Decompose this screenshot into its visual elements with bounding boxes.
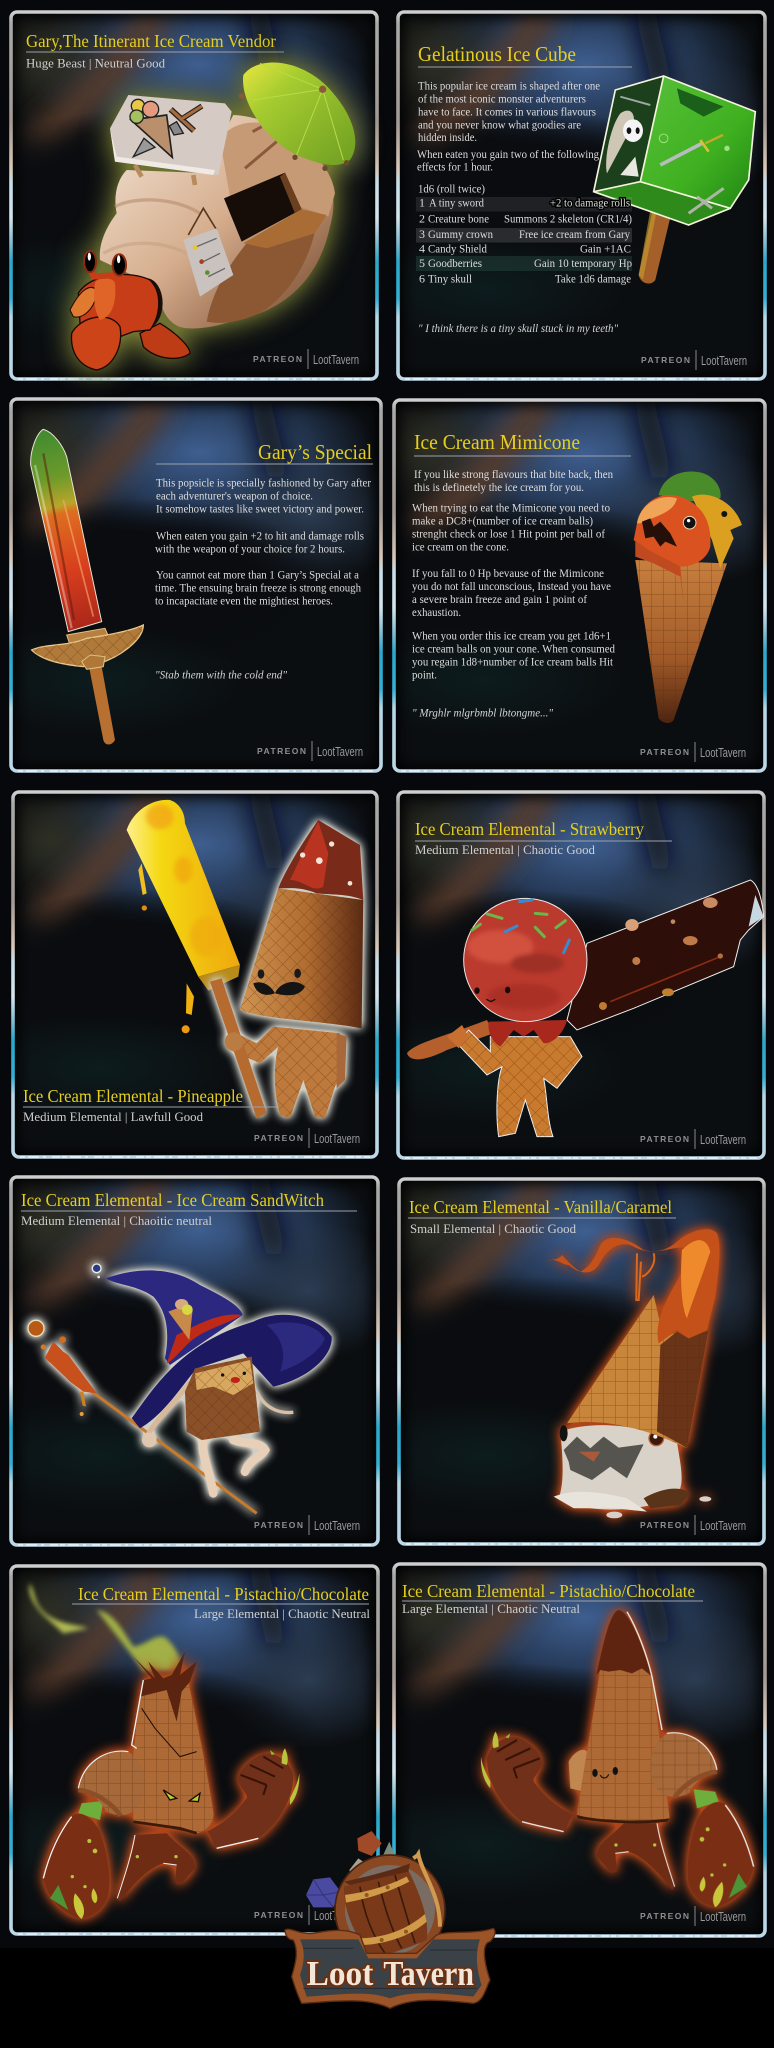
watermark: [253, 349, 359, 369]
panel: Strawberry elemental: [336, 755, 774, 1166]
table: 1d6 effects: A tiny sword: [429, 196, 484, 210]
table: 1d6 effects: 6: [419, 271, 425, 285]
heading: Mimicone: Ice Cream Mimicone: [414, 430, 580, 454]
description: [412, 467, 615, 682]
description: time. The ensuing brain freeze is strong enough: [155, 581, 361, 595]
watermark: [254, 1905, 360, 1925]
watermark: LootTavern: [700, 1909, 746, 1924]
sign plaque: [285, 1928, 495, 2008]
description: have to face. It comes in various flavours: [418, 104, 596, 118]
description: When trying to eat the Mimicone you need to: [412, 501, 610, 515]
watermark: PATREON: [254, 1520, 303, 1530]
heading: Vanilla/Caramel: Ice Cream Elemental - Vanilla/Caramel: [409, 1197, 672, 1217]
table: 1d6 effects: 4: [419, 241, 425, 255]
table: 1d6 effects: 1: [419, 196, 425, 210]
subtitle: SandWitch: Medium Elemental | Chaoitic neutral: [21, 1213, 212, 1228]
watermark: PATREON: [257, 746, 306, 756]
watermark: LootTavern: [317, 744, 363, 759]
table: 1d6 effects: Gain +1AC: [580, 241, 631, 255]
watermark: PATREON: [640, 747, 689, 757]
heading: Pistachio angry: Ice Cream Elemental - Pistachio/Chocolate: [78, 1584, 369, 1604]
subtitle: Gary: Huge Beast | Neutral Good: [26, 56, 165, 71]
logo: Loot Tavern barrel and sign: [285, 1831, 495, 2008]
illustration: strawberry elemental with ice cream bar sword: [407, 880, 764, 1137]
watermark: [640, 1515, 746, 1535]
panel: Pistachio/Chocolate elemental, happy: [332, 1527, 774, 1944]
description: strenght check or lose 1 Hit point per ball of: [412, 527, 605, 541]
table: 1d6 effects: 5: [419, 256, 425, 270]
logo wordmark: Loot: [307, 1954, 374, 1993]
description: with the weapon of your choice for 2 hours.: [155, 541, 345, 555]
heading: cube: Gelatinous Ice Cube: [418, 42, 576, 66]
table: 1d6 effects: Gummy crown: [428, 227, 493, 241]
panel: Pineapple elemental: [0, 755, 407, 1165]
watermark: PATREON: [640, 1134, 689, 1144]
watermark: LootTavern: [314, 1131, 360, 1146]
description: make a DC8+(number of ice cream balls): [412, 514, 593, 528]
watermark: [254, 1128, 360, 1148]
watermark: PATREON: [253, 354, 302, 364]
description: of the most iconic monster adventurers: [418, 91, 586, 105]
watermark: PATREON: [254, 1133, 303, 1143]
table: 1d6 effects: 3: [419, 227, 425, 241]
logo wordmark: [307, 1954, 474, 1993]
description: When eaten you gain +2 to hit and damage rolls: [156, 528, 364, 542]
description: each adventurer's weapon of choice.: [156, 489, 313, 503]
watermark: [254, 1515, 360, 1535]
table: 1d6 effects: Take 1d6 damage: [555, 271, 631, 285]
table: 1d6 effects: Creature bone: [428, 212, 489, 226]
watermark: [640, 1906, 746, 1926]
description: to incapacitate even the mightiest heroes.: [155, 594, 333, 608]
illustration: gelatinous cube popsicle: [594, 76, 755, 284]
description: exhaustion.: [412, 605, 461, 619]
description: This popsicle is specially fashioned by Gary after: [156, 476, 371, 490]
description: If you fall to 0 Hp bevause of the Mimicone: [412, 566, 604, 580]
watermark: LootTavern: [700, 745, 746, 760]
heading: SandWitch: Ice Cream Elemental - Ice Cream SandWitch: [21, 1190, 324, 1210]
quote: cube: " I think there is a tiny skull stuck in my teeth": [418, 321, 619, 335]
watermark: LootTavern: [701, 353, 747, 368]
watermark: LootTavern: [314, 1518, 360, 1533]
illustration: pineapple popsicle: [127, 800, 267, 1118]
illustration: popsicle sword: [31, 429, 143, 744]
illustration: erupting pistachio elemental: [29, 1583, 299, 1919]
description: When eaten you gain two of the following: [417, 147, 599, 161]
heading: Pistachio happy: Ice Cream Elemental - Pistachio/Chocolate: [402, 1581, 695, 1601]
quote: Gary's Special: "Stab them with the cold end": [155, 668, 288, 682]
panel: Gary the itinerant ice cream vendor: [0, 0, 407, 387]
watermark: LootTavern: [313, 352, 359, 367]
panel: Gary's Special: [0, 362, 411, 779]
watermark: [640, 1129, 746, 1149]
illustration: mimic ice cream cone: [634, 472, 742, 723]
watermark: PATREON: [641, 355, 690, 365]
panel: Vanilla/Caramel elemental: [337, 1142, 774, 1552]
description: [155, 476, 371, 608]
icon: barrel: [335, 1854, 445, 1965]
description: you regain 1d8+number of Ice cream balls Hit: [412, 655, 614, 669]
description: and you never know what goodies are: [418, 117, 581, 131]
illustration: vanilla caramel mimic cone: [545, 1229, 720, 1518]
description: You cannot eat more than 1 Gary’s Special at a: [156, 567, 360, 581]
heading: Strawberry: Ice Cream Elemental - Strawberry: [415, 819, 644, 839]
table: 1d6 effects: Goodberries: [428, 256, 482, 270]
heading: Pineapple: Ice Cream Elemental - Pineapple: [23, 1086, 243, 1106]
description: you do not fall unconscious, Instead you have: [412, 579, 611, 593]
table: 1d6 effects: Summons 2 skeleton (CR1/4): [504, 212, 632, 226]
description: When you order this ice cream you get 1d6+1: [412, 629, 611, 643]
panel: Pistachio/Chocolate elemental, angry: [0, 1529, 408, 1942]
watermark: LootTavern: [314, 1908, 360, 1923]
subtitle: Vanilla/Caramel: Small Elemental | Chaotic Good: [410, 1221, 576, 1236]
logo wordmark: Tavern: [383, 1954, 474, 1993]
description: hidden inside.: [418, 130, 477, 144]
description: [417, 78, 600, 174]
watermark: [257, 741, 363, 761]
description: effects for 1 hour.: [417, 160, 493, 174]
description: ice cream balls on your cone. When consumed: [412, 642, 615, 656]
table: 1d6 effects: 1d6 (roll twice): [418, 181, 485, 195]
illustration: smiling pistachio elemental: [481, 1610, 754, 1907]
watermark: PATREON: [254, 1910, 303, 1920]
watermark: LootTavern: [700, 1132, 746, 1147]
table: 1d6 effects: +2 to damage rolls: [550, 196, 630, 210]
subtitle: Pineapple: Medium Elemental | Lawfull Good: [23, 1109, 203, 1124]
description: It somehow tastes like sweet victory and power.: [156, 502, 364, 516]
illustration: hermit crab ice cream shop: [70, 62, 355, 370]
table: 1d6 effects: Tiny skull: [428, 271, 473, 285]
quote: Mimicone: " Mrghlr mlgrbmbl lbtongme...": [412, 706, 554, 720]
panel: Ice Cream Mimicone: [332, 363, 774, 779]
watermark: [641, 350, 747, 370]
description: this is definetely the ice cream for you.: [414, 480, 584, 494]
watermark: LootTavern: [700, 1518, 746, 1533]
table: 1d6 effects: Candy Shield: [428, 241, 487, 255]
panel: Gelatinous Ice Cube: [336, 0, 774, 387]
description: point.: [412, 668, 437, 682]
table: 1d6 effects: [416, 181, 632, 285]
table: 1d6 effects: Free ice cream from Gary: [519, 227, 630, 241]
table: 1d6 effects: Gain 10 temporary Hp: [534, 256, 632, 270]
illustration: mustached cone elemental: [210, 820, 363, 1118]
description: If you like strong flavours that bite back, then: [414, 467, 613, 481]
description: ice cream on the cone.: [412, 540, 509, 554]
illustration: flying ice cream sandwich witch: [28, 1264, 332, 1513]
panel: Ice Cream SandWitch: [0, 1140, 408, 1553]
icon: dice: [306, 1831, 397, 1907]
watermark: PATREON: [640, 1911, 689, 1921]
heading: Gary: Gary,The Itinerant Ice Cream Vendor: [26, 31, 276, 51]
subtitle: Pistachio angry: Large Elemental | Chaotic Neutral: [194, 1606, 370, 1621]
subtitle: Pistachio happy: Large Elemental | Chaotic Neutral: [402, 1601, 580, 1616]
description: a severe brain freeze and gain 1 point of: [412, 592, 587, 606]
watermark: [640, 742, 746, 762]
heading: Gary's Special: Gary’s Special: [258, 440, 372, 464]
watermark: PATREON: [640, 1520, 689, 1530]
subtitle: Strawberry: Medium Elemental | Chaotic Good: [415, 842, 595, 857]
table: 1d6 effects: 2: [419, 212, 425, 226]
description: This popular ice cream is shaped after one: [418, 78, 600, 92]
